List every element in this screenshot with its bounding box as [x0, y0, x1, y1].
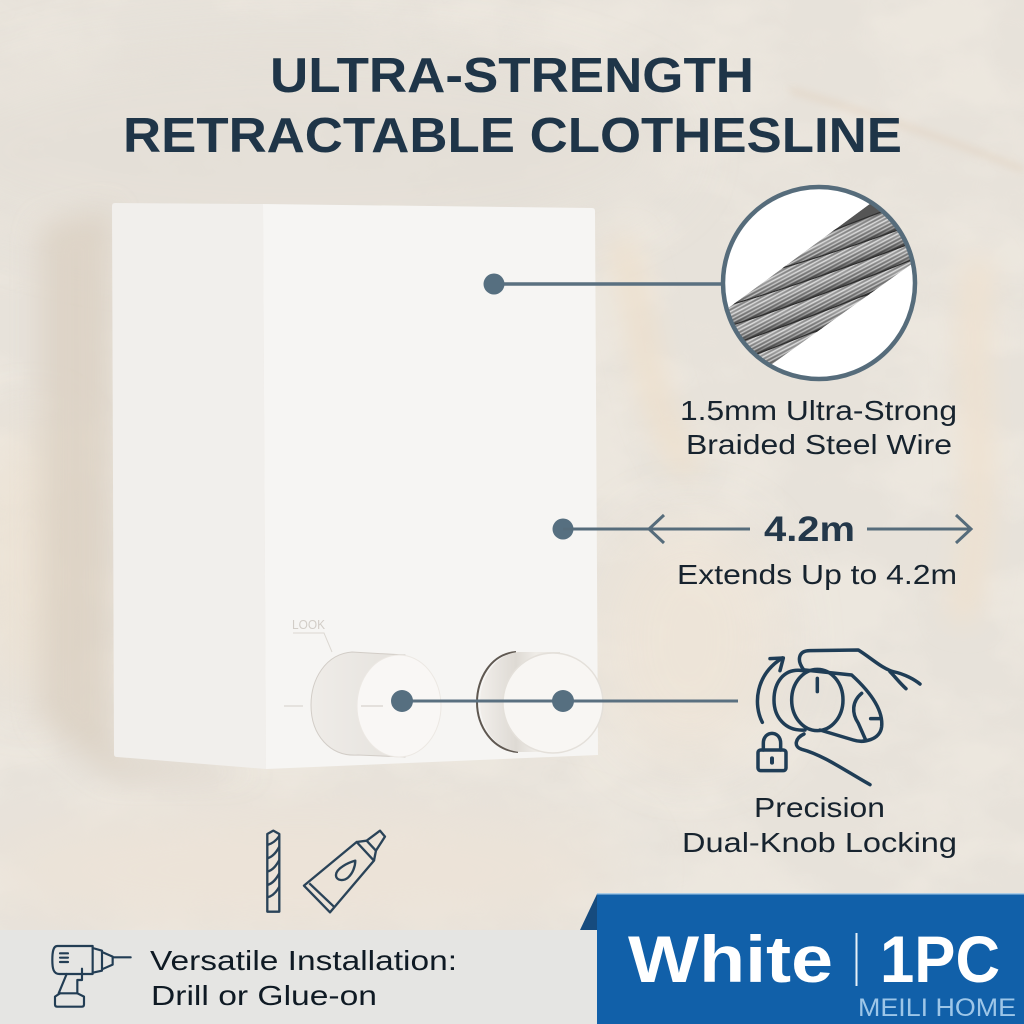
right knob	[477, 652, 603, 753]
blue product badge	[580, 893, 1024, 1024]
length value: 4.2m	[764, 510, 855, 549]
length label: Extends Up to 4.2m	[677, 559, 957, 590]
wire label: 1.5mm Ultra-Strong	[680, 395, 957, 426]
locking label: Precision	[754, 792, 885, 823]
product shadow on wall	[40, 208, 262, 775]
leader line and dot	[484, 274, 724, 294]
wire label	[680, 395, 957, 460]
band background	[0, 930, 600, 1024]
title: RETRACTABLE CLOTHESLINE	[123, 109, 902, 163]
icon: hand turning knob with lock	[757, 650, 920, 785]
installation label	[150, 945, 457, 1011]
installation label: Versatile Installation:	[150, 945, 457, 976]
brand name: MEILI HOME	[858, 994, 1016, 1022]
left knob	[311, 652, 441, 757]
lock label: LOOK	[292, 617, 325, 632]
title	[123, 49, 902, 163]
bottom installation band	[0, 930, 600, 1024]
title: ULTRA-STRENGTH	[270, 49, 754, 103]
badge panel	[597, 894, 1024, 1024]
badge fold	[580, 894, 597, 930]
callout: extension length	[552, 510, 971, 590]
knob leader line and dots	[391, 690, 738, 712]
locking label: Dual-Knob Locking	[682, 827, 957, 858]
dot and double arrow	[552, 515, 971, 543]
housing front face	[263, 204, 598, 769]
badge color and quantity	[628, 922, 1000, 996]
badge color and quantity: White	[628, 922, 833, 996]
callout: dual-knob locking	[391, 650, 957, 858]
wire label: Braided Steel Wire	[686, 429, 952, 460]
housing side face	[112, 203, 266, 769]
lock label	[284, 617, 332, 706]
icon: glue tube	[304, 831, 385, 912]
icon: drill bit	[267, 831, 279, 912]
magnified steel cable lens	[720, 184, 918, 382]
callout: steel wire	[484, 184, 955, 454]
product: white clothesline housing	[112, 203, 603, 769]
locking label	[682, 792, 957, 858]
installation label: Drill or Glue-on	[151, 980, 377, 1011]
icon: cordless drill	[52, 946, 131, 1007]
badge color and quantity: 1PC	[880, 922, 1000, 996]
